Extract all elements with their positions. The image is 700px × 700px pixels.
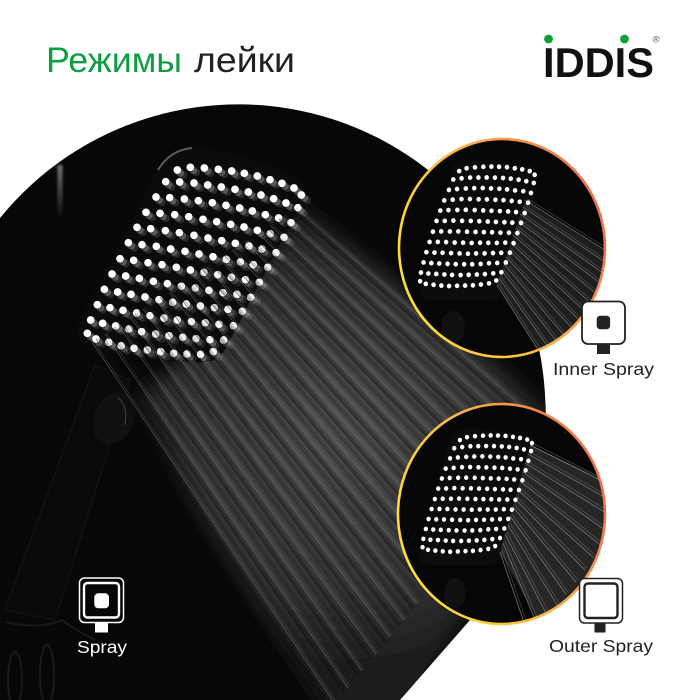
title: лейки (194, 41, 295, 80)
logo: IDDIS: ® (652, 34, 660, 46)
pole highlight (58, 165, 62, 217)
inset spray (496, 198, 604, 349)
handle (5, 365, 130, 620)
title (46, 41, 295, 80)
title: Режимы (46, 41, 182, 80)
photo: shower head on black circle (0, 90, 562, 700)
inset ring (399, 139, 605, 357)
inset knob (444, 578, 466, 608)
logo: IDDIS: IDDIS (543, 39, 654, 86)
inset dots (420, 433, 534, 554)
icon: inner spray (582, 302, 625, 354)
inset: outer spray (396, 402, 606, 626)
label: inner spray: Inner Spray (553, 359, 654, 379)
inset dots (418, 164, 537, 288)
icon: outer spray (580, 578, 622, 632)
mist base (140, 205, 555, 700)
head nozzle dots (83, 163, 311, 363)
bottom fixture (5, 620, 95, 700)
inset head body (420, 160, 537, 300)
inset spray (500, 444, 604, 620)
wall knob (112, 394, 135, 444)
shower head body (173, 214, 295, 362)
inset: inner spray (398, 138, 606, 358)
inset head body (418, 428, 536, 565)
inset knob (441, 311, 465, 343)
inset ring (398, 404, 605, 624)
main water spray (88, 204, 562, 700)
icon: spray (80, 578, 124, 632)
head edge highlight (158, 148, 192, 170)
label: outer spray: Outer Spray (549, 636, 653, 656)
label: spray: Spray (77, 637, 127, 657)
